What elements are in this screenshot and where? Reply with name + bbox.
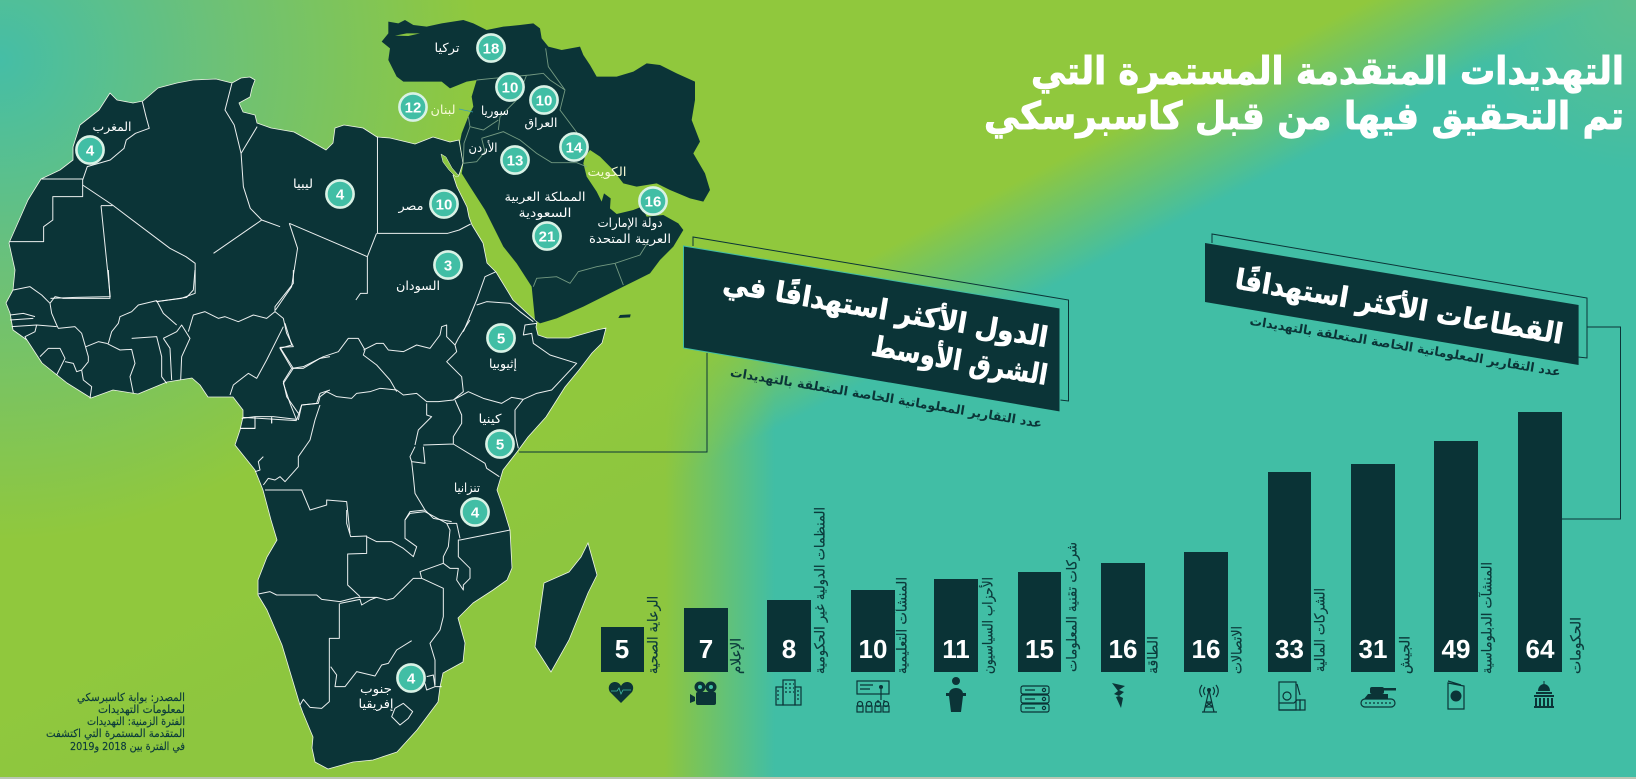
- icon: passport: [1448, 681, 1464, 709]
- marker: Sudan: السودان: [396, 278, 440, 294]
- marker: Libya: [293, 176, 354, 208]
- panel: most targeted countries: [684, 237, 1068, 431]
- bar: IT companies: شركات تقنية المعلومات: [1064, 542, 1080, 672]
- icon: training board: [857, 681, 889, 712]
- marker: Jordan: الأردن: [468, 140, 498, 156]
- heading: countries panel: الدول الأكثر استهدافًا في: [721, 265, 1051, 354]
- marker: Ethiopia: [487, 324, 517, 372]
- source note: لمعلومات التهديدات: [98, 703, 185, 716]
- bar: politicians: الأحزاب السياسيون: [978, 577, 996, 674]
- marker: Jordan: [468, 140, 529, 174]
- marker: Kuwait: الكويت: [588, 164, 626, 180]
- bar: healthcare: 5: [615, 634, 629, 664]
- marker: Morocco: المغرب: [92, 119, 132, 135]
- map: Africa and Middle East: [6, 20, 710, 769]
- marker: Morocco: [76, 119, 132, 164]
- heading: countries panel: الشرق الأوسط: [869, 328, 1050, 392]
- marker: Lebanon: لبنان: [430, 102, 456, 117]
- map: Central and East Africa borders: [240, 320, 577, 533]
- bar: healthcare: [601, 596, 662, 674]
- bar: energy: [1101, 563, 1162, 674]
- marker: Kuwait: [560, 133, 626, 180]
- bar: financial: الشركات المالية: [1312, 588, 1328, 672]
- icon: money and hand: [1279, 682, 1305, 710]
- bar: military: [1351, 464, 1414, 674]
- map: Southern Africa borders: [258, 510, 510, 725]
- marker: Egypt: [397, 190, 458, 218]
- icon: heart: [609, 682, 633, 703]
- bar: education: المنشآت التعليمية: [894, 577, 910, 674]
- source note: المتقدمة المستمرة التي اكتشفت: [46, 727, 185, 740]
- marker: Turkey: تركيا: [434, 40, 460, 56]
- marker: Kuwait: 14: [566, 140, 583, 156]
- marker: Tanzania: 4: [471, 504, 480, 522]
- bar chart: targeted sectors: [601, 412, 1584, 674]
- marker: Libya: ليبيا: [293, 176, 313, 191]
- marker: Iraq: العراق: [524, 115, 558, 131]
- marker: Iraq: 10: [536, 92, 552, 110]
- bar: NGOs: [767, 507, 828, 674]
- map: Gulf of Suez: [441, 154, 459, 177]
- bar: telecom: [1184, 552, 1246, 674]
- bar: NGOs: 8: [782, 634, 796, 664]
- marker: Egypt: مصر: [397, 198, 424, 214]
- marker: UAE: العربية المتحدة: [589, 231, 671, 247]
- bar: government: الحكومات: [1568, 617, 1584, 674]
- marker: Sudan: [396, 251, 462, 294]
- icon: tank: [1361, 687, 1396, 707]
- map: Madagascar: [535, 543, 597, 672]
- leader line: sectors panel to chart: [1562, 327, 1620, 519]
- bar: financial: 33: [1275, 634, 1304, 664]
- bar: government: [1518, 412, 1584, 674]
- marker: Morocco: 4: [86, 142, 95, 160]
- icon: data servers: [1021, 686, 1049, 712]
- marker: Ethiopia: إثيوبيا: [489, 356, 517, 372]
- leader line: countries panel to map: [519, 353, 707, 452]
- marker: Tanzania: [454, 480, 489, 526]
- title: [984, 49, 1624, 139]
- bar: NGOs: المنظمات الدولية غير الحكومية: [812, 507, 828, 674]
- source note: المصدر: بوابة كاسبرسكي: [77, 691, 185, 704]
- marker: Jordan: 13: [507, 152, 523, 170]
- bar: politicians: 11: [942, 634, 970, 664]
- subheading: countries panel: عدد التقارير المعلوماتية الخاصة المتعلقة بالتهديدات: [729, 364, 1043, 431]
- bar: media: [684, 608, 744, 674]
- bar: telecom: الاتصالات: [1230, 626, 1246, 674]
- marker: Sudan: 3: [444, 258, 452, 274]
- marker: Saudi Arabia: [504, 189, 586, 250]
- bar: military: 31: [1359, 634, 1387, 664]
- bar: IT companies: 15: [1025, 634, 1054, 664]
- marker: Saudi Arabia: المملكة العربية: [504, 189, 586, 205]
- marker: Libya: 4: [336, 186, 345, 204]
- marker: South Africa: [358, 664, 425, 712]
- bar: telecom: 16: [1192, 634, 1220, 664]
- marker: Egypt: 10: [436, 196, 452, 214]
- map: North Africa borders: [9, 83, 471, 310]
- icon: lightning bolt: [1112, 683, 1125, 708]
- marker: Saudi Arabia: 21: [539, 228, 555, 246]
- marker: Syria: سوريا: [481, 103, 509, 119]
- bar: education: 10: [859, 634, 887, 664]
- map labels and values: [76, 34, 671, 712]
- marker: Syria: [481, 73, 524, 119]
- bar: energy: 16: [1109, 634, 1137, 664]
- icon: radio tower: [1200, 685, 1218, 712]
- marker: South Africa: جنوب: [360, 681, 392, 697]
- leader line: Lebanon: [459, 109, 473, 112]
- bar: education: [851, 577, 910, 674]
- bar: diplomatic: [1434, 441, 1496, 674]
- marker: South Africa: إفريقيا: [358, 696, 394, 712]
- bar: government: 64: [1526, 634, 1555, 664]
- source note: [46, 691, 185, 753]
- icon: office building: [776, 680, 801, 705]
- bar: IT companies: [1018, 542, 1080, 672]
- marker: Kenya: [478, 411, 514, 458]
- marker: UAE: [589, 187, 671, 247]
- marker: Lebanon: [399, 93, 456, 121]
- marker: Iraq: [524, 86, 558, 131]
- marker: Turkey: [434, 34, 505, 62]
- marker: Saudi Arabia: السعودية: [518, 205, 572, 221]
- bar: military: الجيش: [1398, 636, 1414, 674]
- bar: politicians: [934, 577, 996, 674]
- subheading: sectors panel: عدد التقارير المعلوماتية الخاصة المتعلقة بالتهديدات: [1249, 313, 1562, 379]
- heading: countries panel: [721, 265, 1051, 392]
- marker: Syria: 10: [502, 80, 518, 96]
- marker: Lebanon: 12: [405, 100, 421, 116]
- icon: film camera: [690, 682, 716, 705]
- icon: capitol dome: [1534, 681, 1554, 708]
- bar: financial: [1268, 472, 1328, 672]
- heading: sectors panel: القطاعات الأكثر استهدافًا: [1233, 262, 1566, 351]
- icon: podium speaker: [946, 677, 966, 712]
- marker: UAE: 16: [645, 194, 661, 210]
- bar: energy: الطاقة: [1146, 636, 1162, 674]
- source note: الفترة الزمنية: التهديدات: [87, 715, 185, 728]
- map: West Africa borders: [10, 270, 330, 428]
- map: Africa landmass: [6, 77, 606, 769]
- marker: UAE: دولة الإمارات: [598, 215, 662, 231]
- marker: Ethiopia: 5: [497, 330, 505, 348]
- source note: في الفترة بين 2018 و2019: [70, 740, 185, 753]
- bar: diplomatic: 49: [1442, 634, 1470, 664]
- map: Turkey, Levant, Arabia and Iran: [382, 20, 710, 332]
- marker: Kenya: كينيا: [478, 411, 502, 426]
- marker: Turkey: 18: [483, 40, 499, 58]
- bar: media: 7: [699, 634, 713, 664]
- marker: Kenya: 5: [496, 436, 504, 454]
- bar: diplomatic: المنشآت الدبلوماسية: [1478, 562, 1496, 674]
- marker: Tanzania: تنزانيا: [454, 480, 480, 496]
- marker: South Africa: 4: [407, 670, 416, 688]
- panel: most targeted sectors: [1205, 234, 1587, 379]
- bar: healthcare: الرعاية الصحية: [646, 596, 662, 674]
- bar: media: الإعلام: [728, 638, 744, 674]
